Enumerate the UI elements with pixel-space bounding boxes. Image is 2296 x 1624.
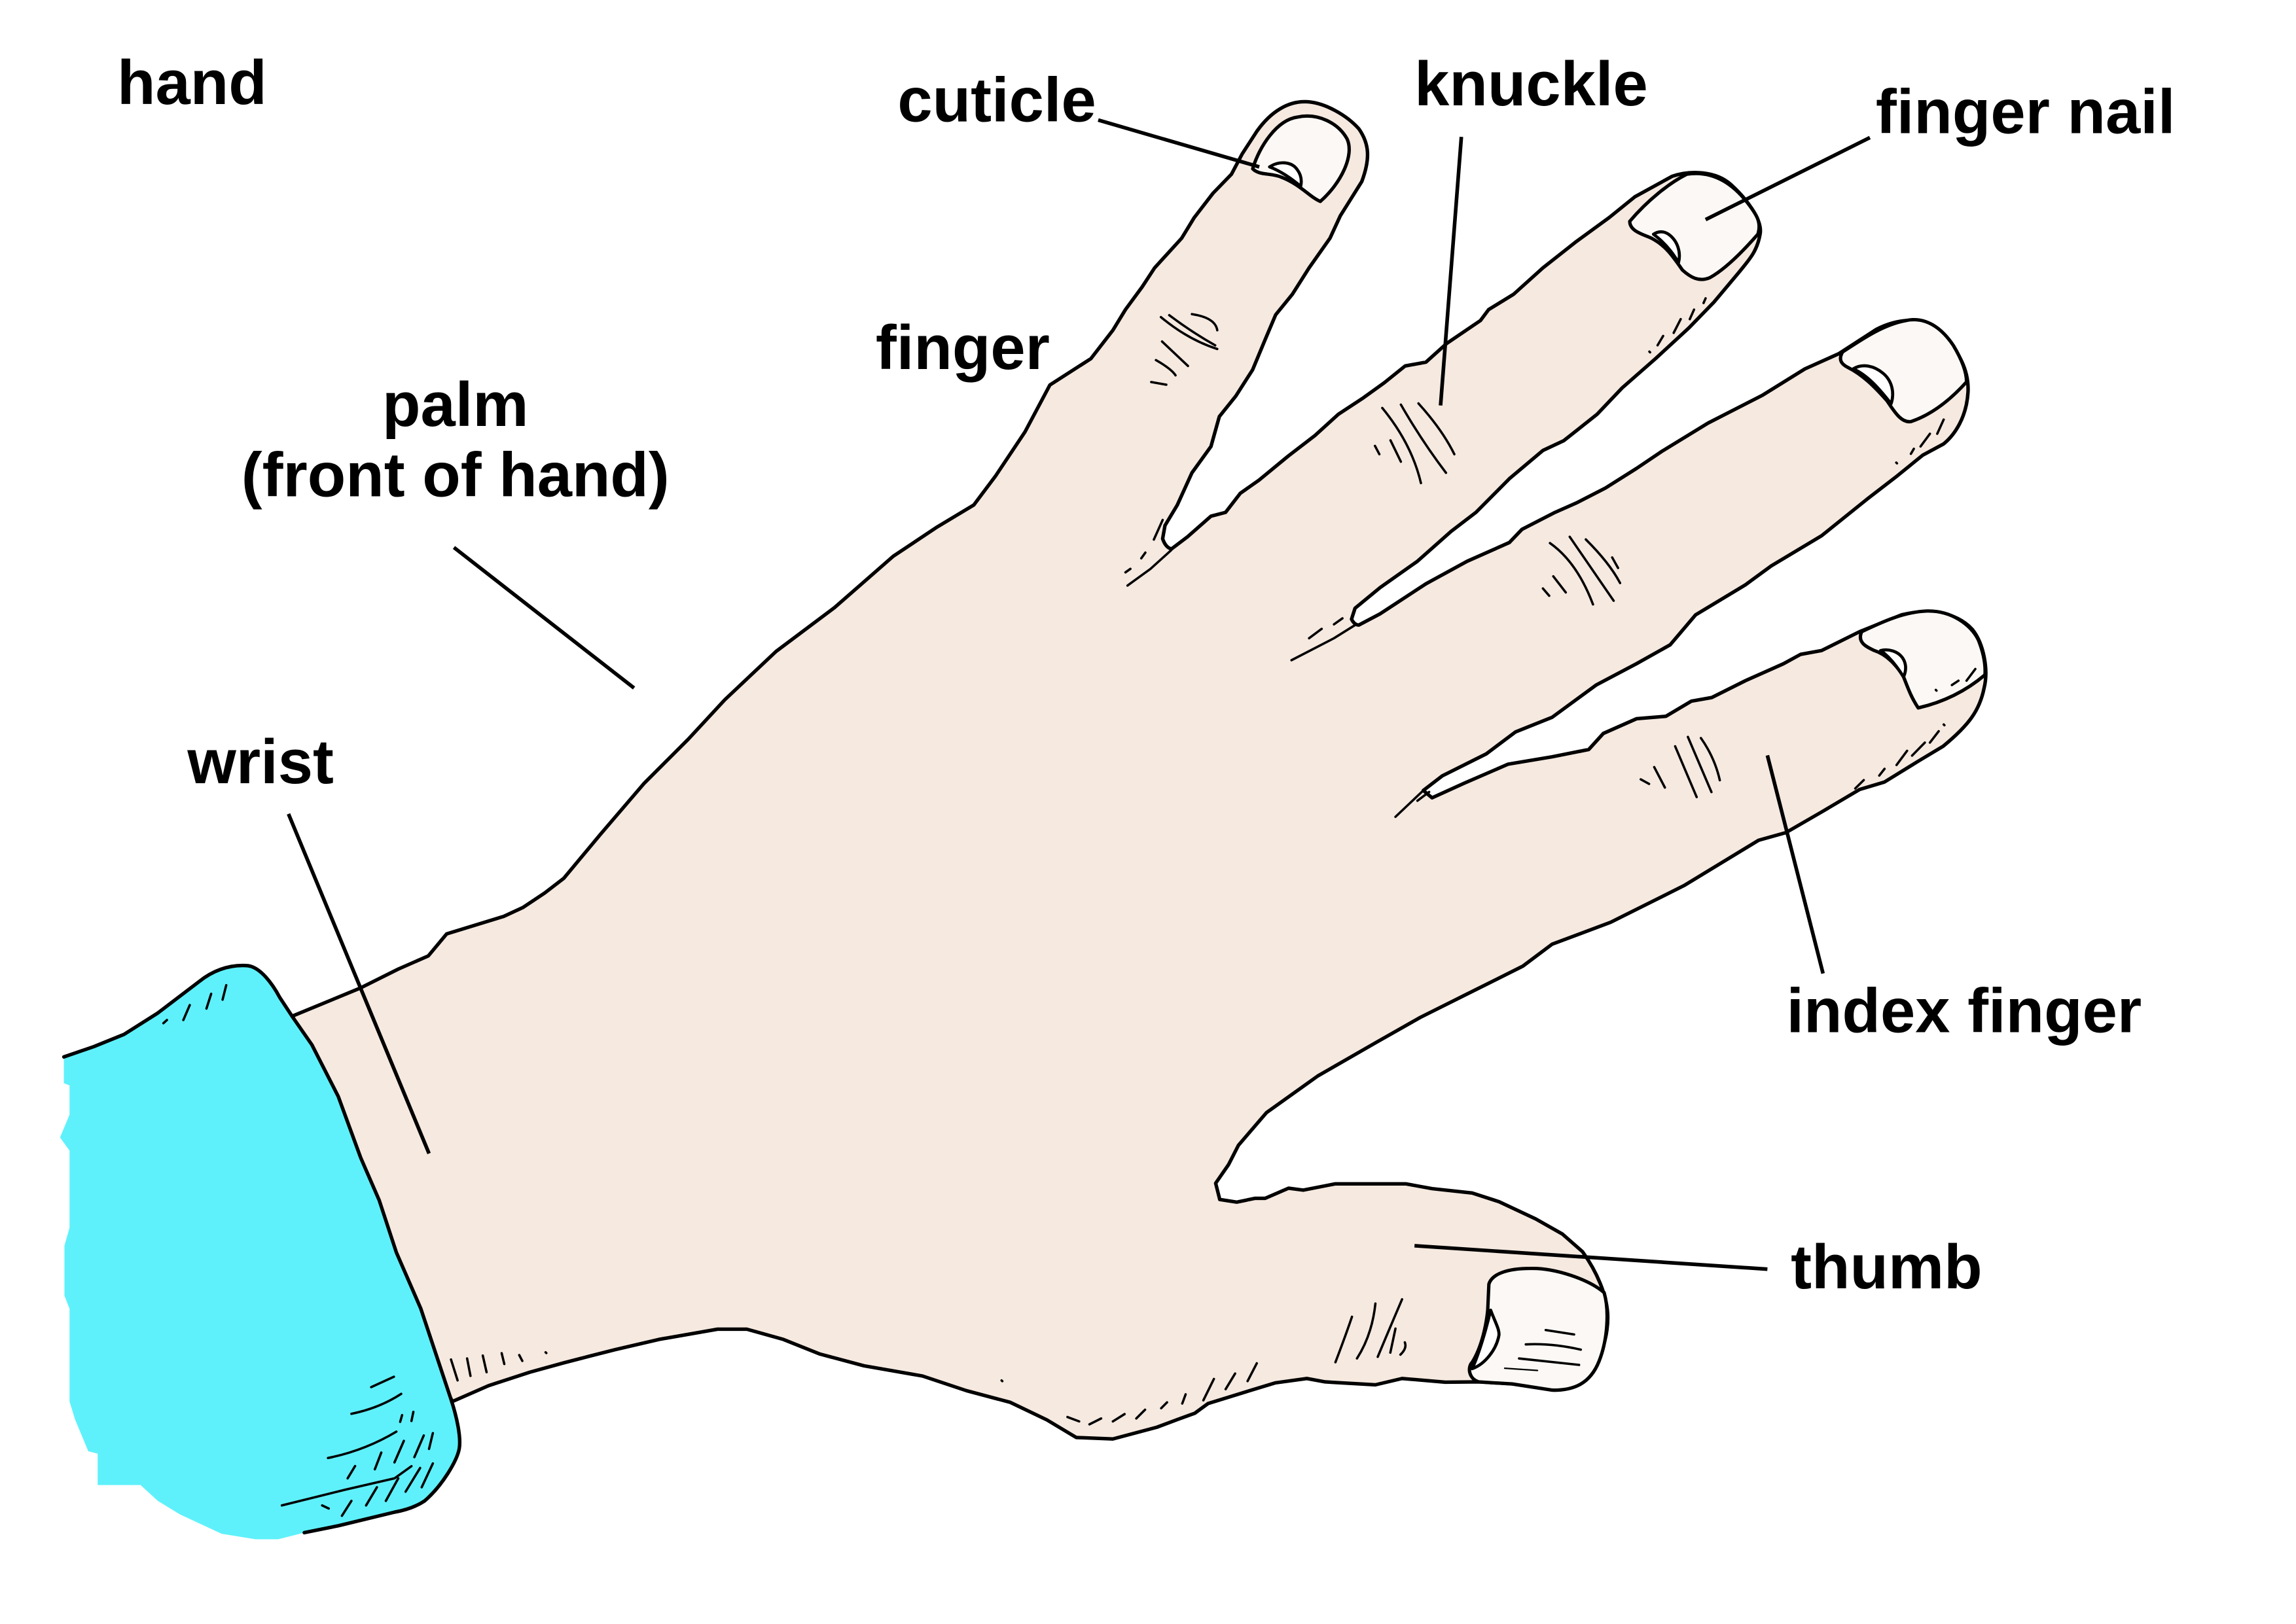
label: palm (front of hand) with pointer (242, 370, 670, 688)
label: finger nail with pointer: finger nail (1876, 77, 2175, 147)
fingernail: middle finger (1840, 320, 1967, 421)
label: wrist with pointer: wrist (187, 727, 334, 797)
label: index finger with pointer (1767, 755, 2142, 1046)
label: index finger with pointer: index finger (1786, 976, 2142, 1046)
label: cuticle with pointer: cuticle (897, 65, 1096, 135)
label: finger: finger (876, 313, 1050, 383)
label: finger nail with pointer (1706, 77, 2175, 220)
fingernail: little finger (1253, 116, 1349, 202)
title: hand: hand (117, 48, 267, 118)
label: knuckle with pointer: knuckle (1414, 49, 1648, 119)
fingernail: ring finger (1630, 173, 1759, 279)
label: knuckle with pointer (1414, 49, 1648, 406)
hand illustration (293, 101, 1986, 1439)
fingernail: index finger (1860, 611, 1985, 708)
label: palm (front of hand) with pointer: (front of hand) (242, 440, 670, 510)
label: cuticle with pointer (897, 65, 1259, 167)
label: thumb with pointer (1414, 1232, 1982, 1302)
label: wrist with pointer (187, 727, 429, 1154)
label: palm (front of hand) with pointer: palm (382, 370, 529, 440)
hand outline (293, 101, 1986, 1439)
skin creases and knuckle wrinkles (451, 298, 1975, 1424)
fingernail: thumb (1469, 1269, 1607, 1390)
label: thumb with pointer: thumb (1791, 1232, 1982, 1302)
shirt cuff: blue sleeve (60, 966, 459, 1539)
